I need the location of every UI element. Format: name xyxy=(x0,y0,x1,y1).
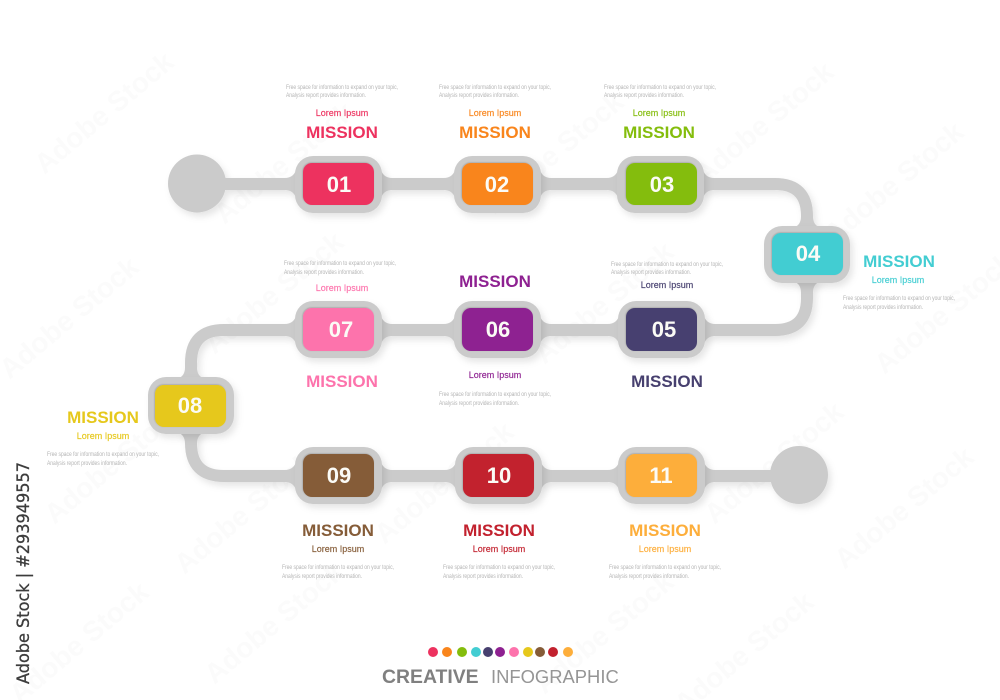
step 10: MISSION xyxy=(463,521,535,540)
step 05: Lorem Ipsum xyxy=(641,280,693,290)
step 08: Free space for information to expand on your topic, xyxy=(47,451,159,458)
step 08: Analysis report provides information. xyxy=(47,460,127,467)
step 03: Analysis report provides information. xyxy=(604,92,684,99)
watermark pattern: Adobe Stock xyxy=(198,556,350,690)
watermark pattern: Adobe Stock xyxy=(368,416,520,550)
step 02: MISSION xyxy=(459,123,531,142)
winding road connector xyxy=(168,154,828,504)
step 10 xyxy=(443,447,555,580)
step 05: 05 xyxy=(652,317,676,342)
step 01: 01 xyxy=(327,172,351,197)
step 09: Analysis report provides information. xyxy=(282,573,362,580)
step 08: MISSION xyxy=(67,408,139,427)
step 07: Lorem Ipsum xyxy=(316,283,368,293)
step 06: MISSION xyxy=(459,272,531,291)
step 11: Lorem Ipsum xyxy=(639,544,691,554)
step 01: Lorem Ipsum xyxy=(316,108,368,118)
step 01: Analysis report provides information. xyxy=(286,92,366,99)
step 10: Free space for information to expand on your topic, xyxy=(443,564,555,571)
step 11: Analysis report provides information. xyxy=(609,573,689,580)
step 02 xyxy=(439,84,551,213)
step 03: 03 xyxy=(650,172,674,197)
step 06: Analysis report provides information. xyxy=(439,400,519,407)
step 03: Lorem Ipsum xyxy=(633,108,685,118)
step 05: MISSION xyxy=(631,372,703,391)
watermark pattern: Adobe Stock xyxy=(528,236,680,370)
step 07: Free space for information to expand on your topic, xyxy=(284,260,396,267)
stock id side label: Adobe Stock | #293949557 xyxy=(14,462,34,684)
step 08: 08 xyxy=(178,393,202,418)
step 04: MISSION xyxy=(863,252,935,271)
step 09: Lorem Ipsum xyxy=(312,544,364,554)
step 06 xyxy=(439,272,551,407)
step 02: Free space for information to expand on your topic, xyxy=(439,84,551,91)
watermark pattern: Adobe Stock xyxy=(28,46,180,180)
step 11: 11 xyxy=(649,463,673,488)
step 09: MISSION xyxy=(302,521,374,540)
title xyxy=(382,666,619,688)
title: CREATIVE xyxy=(382,666,479,688)
watermark pattern: Adobe Stock xyxy=(208,96,360,230)
step 04: Analysis report provides information. xyxy=(843,304,923,311)
step 06: Lorem Ipsum xyxy=(469,370,521,380)
step 09 xyxy=(282,447,394,580)
step 08: Lorem Ipsum xyxy=(77,431,129,441)
step 11: Free space for information to expand on your topic, xyxy=(609,564,721,571)
start circle xyxy=(168,154,226,212)
step 02: Lorem Ipsum xyxy=(469,108,521,118)
step 01: Free space for information to expand on your topic, xyxy=(286,84,398,91)
step 04: 04 xyxy=(796,241,821,266)
step 04: Free space for information to expand on your topic, xyxy=(843,295,955,302)
watermark pattern: Adobe Stock xyxy=(528,566,680,700)
title: INFOGRAPHIC xyxy=(491,666,619,687)
step 06: Free space for information to expand on your topic, xyxy=(439,391,551,398)
step 10: Analysis report provides information. xyxy=(443,573,523,580)
step 10: 10 xyxy=(487,463,511,488)
watermark pattern: Adobe Stock xyxy=(828,441,980,575)
watermark pattern: Adobe Stock xyxy=(478,86,630,220)
step 04 xyxy=(764,226,955,311)
step 02: 02 xyxy=(485,172,509,197)
step 05: Free space for information to expand on your topic, xyxy=(611,261,723,268)
step 04: Lorem Ipsum xyxy=(872,275,924,285)
step 05 xyxy=(611,261,723,391)
step 09: 09 xyxy=(327,463,351,488)
step 01: MISSION xyxy=(306,123,378,142)
step 03: MISSION xyxy=(623,123,695,142)
step 07: 07 xyxy=(329,317,353,342)
watermark pattern: Adobe Stock xyxy=(818,116,970,250)
step 05: Analysis report provides information. xyxy=(611,269,691,276)
step 10: Lorem Ipsum xyxy=(473,544,525,554)
watermark pattern: Adobe Stock xyxy=(168,446,320,580)
legend colour dots xyxy=(428,647,573,657)
step 11: MISSION xyxy=(629,521,701,540)
step 09: Free space for information to expand on your topic, xyxy=(282,564,394,571)
step 02: Analysis report provides information. xyxy=(439,92,519,99)
watermark pattern: Adobe Stock xyxy=(198,226,350,360)
step 06: 06 xyxy=(486,317,510,342)
watermark pattern: Adobe Stock xyxy=(698,396,850,530)
step 11 xyxy=(609,447,721,580)
step 01 xyxy=(286,84,398,213)
watermark pattern: Adobe Stock xyxy=(38,396,190,530)
step 03 xyxy=(604,84,716,213)
step 07: Analysis report provides information. xyxy=(284,269,364,276)
step 07 xyxy=(284,260,396,391)
step 07: MISSION xyxy=(306,372,378,391)
end circle xyxy=(770,446,828,504)
step 03: Free space for information to expand on your topic, xyxy=(604,84,716,91)
watermark pattern: Adobe Stock xyxy=(688,56,840,190)
step 08 xyxy=(47,377,234,467)
